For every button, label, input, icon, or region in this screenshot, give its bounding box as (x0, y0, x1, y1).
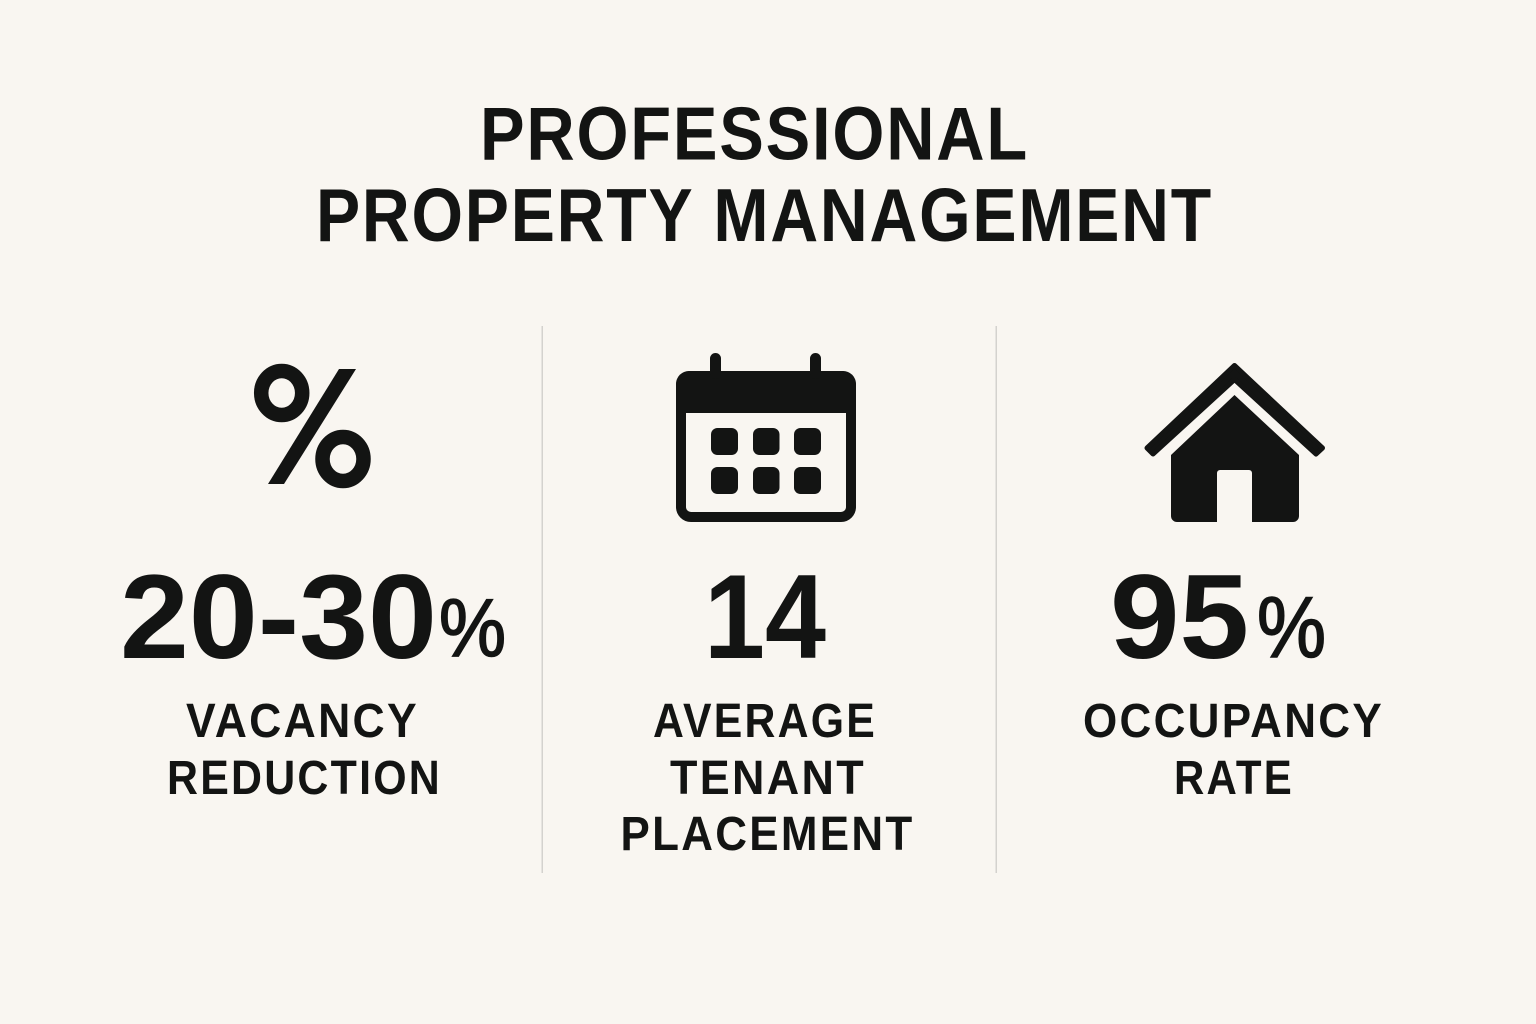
stat: 14: 14 (704, 550, 826, 684)
title: PROFESSIONAL (480, 92, 1029, 176)
label: vacancy reduction: VACANCY (186, 695, 419, 748)
stat: 95%: 95 (1110, 550, 1249, 684)
icon: calendar (676, 353, 856, 517)
label: average tenant placement: AVERAGE (653, 695, 877, 748)
icon: percent (261, 369, 364, 484)
label: average tenant placement: TENANT (670, 752, 866, 805)
title (316, 92, 1213, 257)
stat: 20-30%: % (439, 583, 506, 674)
label: average tenant placement: PLACEMENT (620, 808, 914, 861)
label: occupancy rate: RATE (1174, 752, 1294, 805)
label: average tenant placement (620, 695, 914, 861)
icon: house (1147, 366, 1322, 522)
label: occupancy rate (1083, 695, 1384, 805)
stat: 95% (1110, 550, 1326, 684)
title: PROPERTY MANAGEMENT (316, 173, 1213, 257)
label: vacancy reduction (167, 695, 442, 805)
label: vacancy reduction: REDUCTION (167, 752, 442, 805)
stat: 20-30%: 20-30 (120, 550, 437, 684)
stat: 95%: % (1257, 580, 1326, 676)
label: occupancy rate: OCCUPANCY (1083, 695, 1384, 748)
